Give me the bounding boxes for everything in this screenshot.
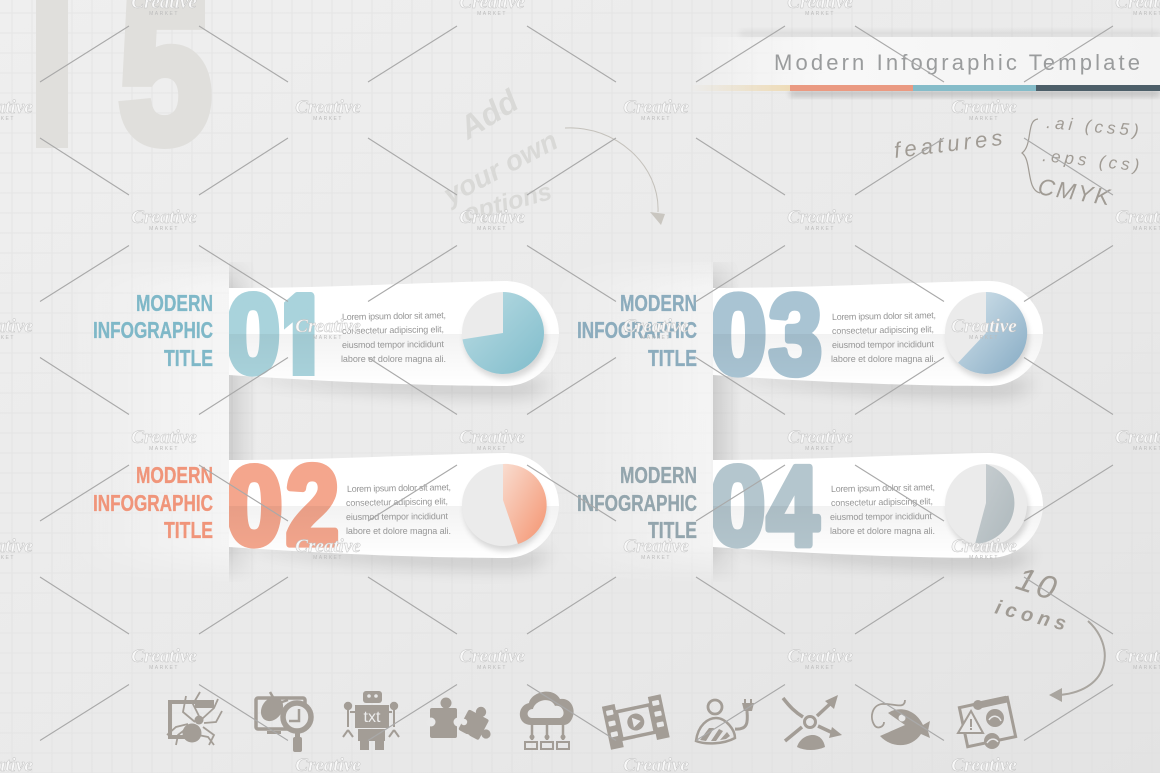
watermarks: MARKET: [641, 335, 671, 341]
icon: cloud network: [520, 692, 574, 749]
header title: Modern Infographic Template: [774, 50, 1140, 75]
watermarks: MARKET: [969, 116, 999, 122]
icon: text robot: [343, 691, 399, 750]
title 01: [93, 290, 213, 371]
title 01: MODERN: [136, 290, 213, 316]
icon: text robot: txt: [364, 709, 381, 726]
icon: spider on window: [167, 692, 222, 745]
watermarks: Creative: [951, 97, 1017, 118]
watermarks: MARKET: [805, 226, 835, 232]
watermarks: Creative: [459, 207, 525, 228]
title 01: INFOGRAPHIC: [93, 317, 213, 343]
watermarks: MARKET: [313, 116, 343, 122]
number 03: 0: [710, 273, 766, 397]
side strip: left column: [170, 266, 249, 574]
watermarks: MARKET: [805, 446, 835, 452]
watermarks: Creative: [459, 646, 525, 667]
watermarks: MARKET: [805, 11, 835, 17]
icon: bug scan on monitor: [256, 692, 311, 752]
watermarks: Creative: [131, 427, 197, 448]
number 01: [229, 291, 314, 377]
note: add your own options: your own: [436, 124, 563, 211]
number 03: [713, 291, 822, 378]
header banner: [690, 30, 1160, 97]
watermarks: MARKET: [313, 335, 343, 341]
side strip: right column: [650, 264, 733, 574]
note: features list: [893, 113, 1144, 211]
note: features list: .eps (cs): [1042, 146, 1144, 176]
body text 04: [830, 482, 935, 536]
note: 10 icons: 10: [1012, 559, 1064, 608]
watermarks: MARKET: [477, 226, 507, 232]
watermarks: Creative: [787, 427, 853, 448]
watermarks: MARKET: [149, 226, 179, 232]
body text 03: [831, 310, 936, 364]
icon: puzzle pieces: [426, 698, 491, 740]
body text 01: Lorem ipsum dolor sit amet,: [342, 310, 446, 322]
big background number 15: [36, 0, 212, 149]
body text 01: consectetur adipiscing elit,: [342, 324, 444, 336]
watermarks: MARKET: [149, 446, 179, 452]
watermarks: MARKET: [313, 555, 343, 561]
body text 02: labore et dolore magna ali.: [346, 526, 451, 536]
panel: option 04: [577, 444, 1043, 570]
pie chart 02: [462, 464, 547, 551]
panel: option 02: [93, 444, 559, 570]
body text 02: consectetur adipiscing elit,: [346, 496, 448, 508]
icon: film strip: [602, 694, 670, 750]
body text 02: [346, 482, 451, 536]
body text 03: eiusmod tempor incididunt: [832, 339, 934, 350]
title 02: TITLE: [164, 517, 213, 543]
number 04: [713, 463, 822, 549]
watermarks: MARKET: [969, 335, 999, 341]
watermarks: Creative: [951, 536, 1017, 557]
watermarks: Creative: [295, 316, 361, 337]
body text 01: labore et dolore magna ali.: [341, 354, 446, 364]
body text 04: Lorem ipsum dolor sit amet,: [831, 482, 935, 494]
title 04: INFOGRAPHIC: [577, 490, 697, 516]
number 02: 2: [286, 444, 339, 569]
body text 01: eiusmod tempor incididunt: [342, 339, 444, 350]
title 03: [577, 290, 697, 371]
watermarks: Creative: [951, 316, 1017, 337]
note: add your own options: Add: [452, 82, 526, 146]
icon: piranha and hook: [872, 700, 930, 745]
watermarks: MARKET: [641, 555, 671, 561]
watermarks: MARKET: [805, 665, 835, 671]
pie chart 03: [945, 292, 1029, 379]
watermarks: Creative: [131, 646, 197, 667]
number 01: 0: [226, 273, 280, 396]
title 03: TITLE: [648, 345, 697, 371]
watermarks: MARKET: [969, 555, 999, 561]
watermarks: MARKET: [149, 665, 179, 671]
icon: diverging arrows: [783, 695, 842, 750]
title 04: MODERN: [620, 462, 697, 488]
arrow: options to panels: [565, 128, 665, 225]
pie chart 01: [462, 292, 546, 379]
body text 01: [341, 310, 446, 364]
watermarks: Creative: [623, 316, 689, 337]
watermarks: MARKET: [477, 446, 507, 452]
icon: person with plug: [696, 699, 754, 743]
panel: option 01: [94, 281, 559, 403]
watermarks: Creative: [295, 97, 361, 118]
pie chart 04: [945, 464, 1029, 551]
number 04: 4: [767, 444, 819, 569]
watermarks: MARKET: [149, 11, 179, 17]
watermarks: MARKET: [477, 665, 507, 671]
watermarks: MARKET: [477, 11, 507, 17]
number 02: 0: [226, 445, 282, 568]
body text 02: Lorem ipsum dolor sit amet,: [347, 482, 451, 494]
body text 03: Lorem ipsum dolor sit amet,: [832, 310, 936, 322]
watermarks: Creative: [459, 427, 525, 448]
watermarks: Creative: [787, 207, 853, 228]
note: features list: CMYK: [1036, 173, 1114, 211]
colour bar: [690, 85, 1160, 91]
note: features list: features: [893, 124, 1008, 163]
note: add your own options: [436, 82, 563, 228]
watermarks: Creative: [295, 536, 361, 557]
number 02: [229, 462, 338, 549]
title 02: INFOGRAPHIC: [93, 490, 213, 516]
watermarks: Creative: [623, 97, 689, 118]
number 04: 0: [710, 445, 765, 568]
title 04: TITLE: [648, 517, 697, 543]
icon: warning window: [958, 695, 1016, 749]
title 03: MODERN: [620, 290, 697, 316]
icon row: [167, 691, 1016, 752]
title 04: [577, 462, 697, 543]
note: 10 icons: [993, 559, 1073, 637]
title 02: MODERN: [136, 462, 213, 488]
note: 10 icons: icons: [993, 597, 1073, 637]
body text 03: consectetur adipiscing elit,: [832, 324, 934, 336]
arrow: to icons: [1049, 621, 1105, 702]
number 03: 3: [769, 273, 822, 398]
body text 03: labore et dolore magna ali.: [831, 354, 936, 364]
number 01: 1: [271, 266, 331, 429]
title 03: INFOGRAPHIC: [577, 317, 697, 343]
watermarks: Creative: [787, 646, 853, 667]
note: add your own options: options: [460, 177, 555, 228]
watermarks: Creative: [131, 207, 197, 228]
title 02: [93, 462, 213, 543]
body text 04: eiusmod tempor incididunt: [830, 511, 932, 522]
watermarks: Creative: [623, 536, 689, 557]
watermarks: MARKET: [641, 116, 671, 122]
panel: option 03: [577, 273, 1043, 398]
body text 02: eiusmod tempor incididunt: [346, 511, 448, 522]
title 01: TITLE: [164, 345, 213, 371]
body text 04: consectetur adipiscing elit,: [831, 496, 933, 508]
note: features list: .ai (cs5): [1046, 113, 1143, 140]
body text 04: labore et dolore magna ali.: [830, 526, 935, 536]
